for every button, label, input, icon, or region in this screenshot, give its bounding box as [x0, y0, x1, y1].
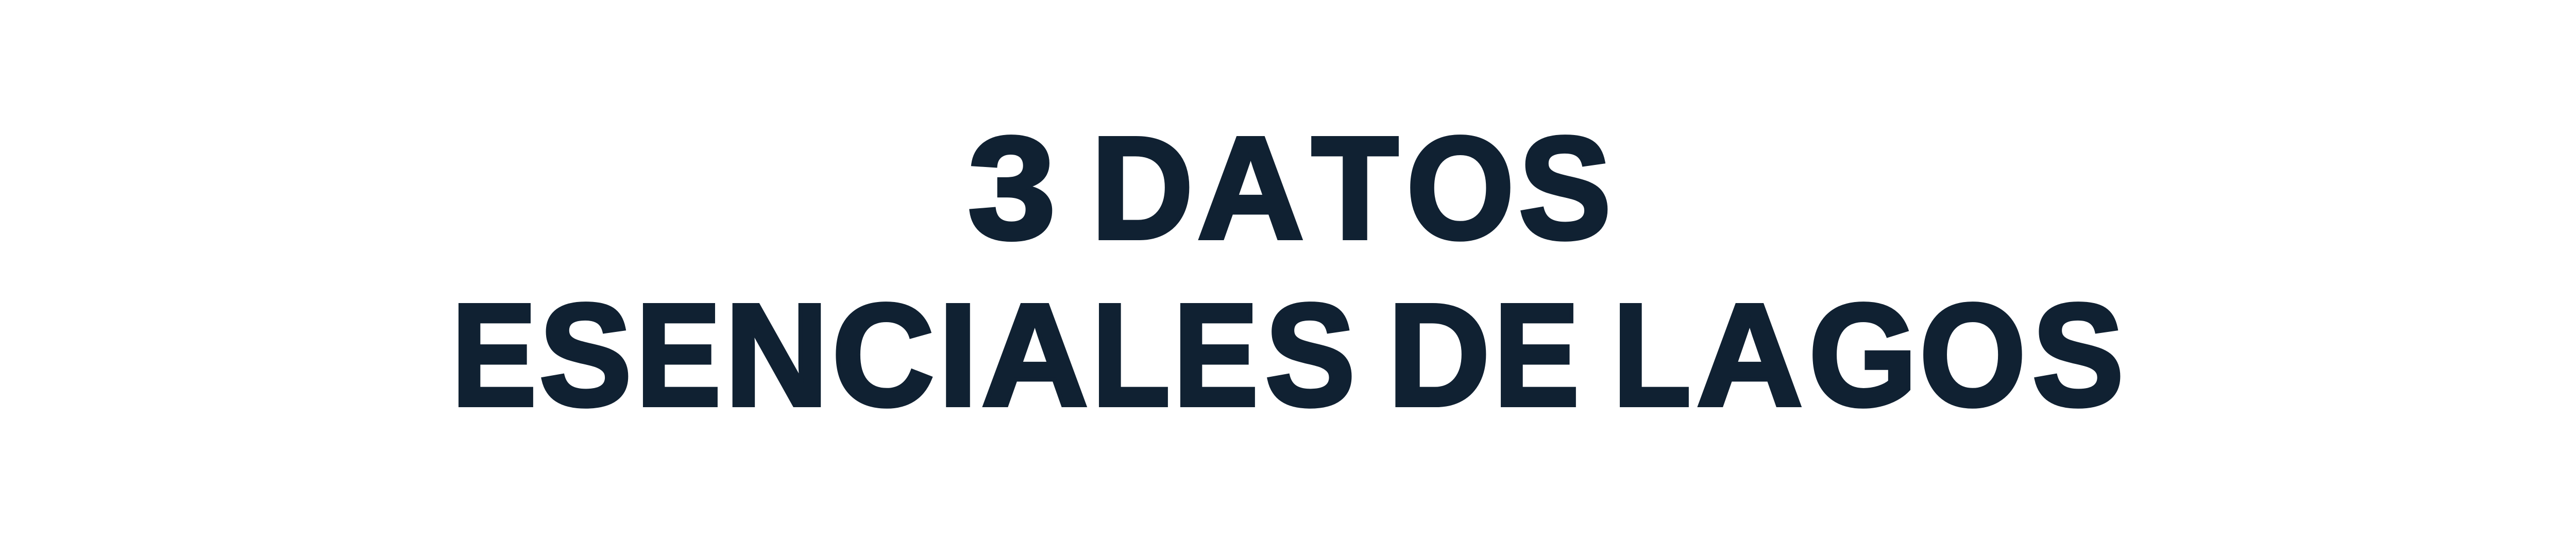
title line 1: O [1406, 107, 1514, 269]
title line 2: S [2032, 274, 2124, 436]
title line 2: D [1388, 274, 1490, 436]
title line 2: G [1809, 274, 1917, 436]
title line 1: T [1312, 107, 1398, 269]
title line 2: C [832, 274, 934, 436]
title line 1: S [1519, 107, 1611, 269]
title line 2: S [539, 274, 632, 436]
title line 2: N [725, 274, 828, 436]
title line 2: E [1174, 274, 1258, 436]
title line 1: D [1091, 107, 1193, 269]
title [452, 107, 2124, 436]
title line 2: A [981, 274, 1088, 436]
title line 2: S [1265, 274, 1355, 436]
title line 2: E [636, 274, 721, 436]
title line 2: I [939, 274, 977, 436]
title line 2: E [1494, 274, 1579, 436]
title line 2: E [452, 274, 536, 436]
title line 1: A [1197, 107, 1304, 269]
title line 2: L [1092, 274, 1170, 436]
title line 2 [452, 274, 2124, 436]
title line 2: O [1920, 274, 2026, 436]
title line 1 [968, 107, 1611, 269]
title line 1: 3 [968, 107, 1056, 269]
title line 2: A [1697, 274, 1803, 436]
title line 2: L [1613, 274, 1691, 436]
